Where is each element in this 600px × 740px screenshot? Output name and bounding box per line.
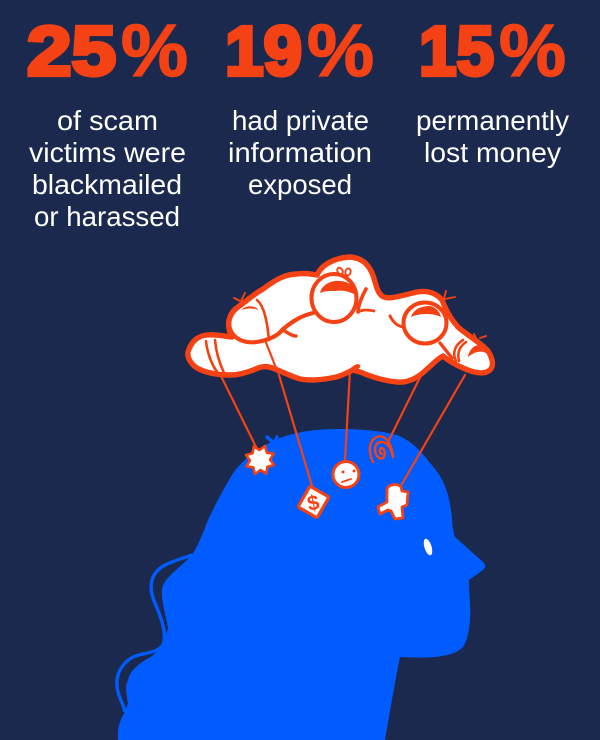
- number: 15%: 15: [419, 12, 494, 90]
- icon: puzzle piece: [378, 485, 408, 519]
- number: 15%: %: [499, 9, 566, 92]
- fingernails: [241, 281, 486, 357]
- label: 15 percent: lost money: [424, 137, 561, 168]
- label: 19 percent: information: [228, 137, 372, 168]
- icon: dollar tag: [298, 486, 329, 518]
- icon: smiling face: [333, 462, 359, 488]
- stat: 15 percent: [416, 9, 569, 168]
- label: 19 percent: [228, 105, 372, 200]
- number: 25%: 25: [27, 12, 116, 90]
- illustration: puppeteer hand: [188, 257, 492, 382]
- label: 25 percent: victims were: [29, 137, 186, 168]
- knots: [234, 267, 486, 338]
- number: 15%: [419, 9, 566, 92]
- hair strand outline: [117, 555, 192, 712]
- hand outline: [188, 257, 492, 382]
- stat: 25 percent: [27, 9, 188, 232]
- icon: spiral: [370, 436, 393, 462]
- illustration: head silhouette: [117, 429, 485, 740]
- number: 19%: [225, 9, 374, 92]
- label: 15 percent: [416, 105, 569, 168]
- number: 25%: %: [121, 9, 188, 92]
- left fingertip and wrist crease: [229, 306, 313, 342]
- head shape: [118, 429, 485, 740]
- label: 15 percent: permanently: [416, 105, 569, 136]
- label: 25 percent: of scam: [57, 105, 158, 136]
- finger creases: [206, 289, 466, 373]
- number: 19%: %: [307, 9, 374, 92]
- icon: star: [246, 446, 274, 474]
- stat: 19 percent: [225, 9, 374, 200]
- label: 19 percent: had private: [232, 105, 369, 136]
- icon: blue tuft: [267, 437, 277, 443]
- label: 25 percent: or harassed: [34, 201, 180, 232]
- label: 19 percent: exposed: [248, 169, 352, 200]
- string inside hand: [265, 340, 278, 373]
- centre fingertip: [312, 274, 356, 322]
- label: 25 percent: blackmailed: [32, 169, 182, 200]
- number: 25%: [27, 9, 188, 92]
- icon: dollar tag: $: [305, 491, 322, 516]
- illustration: puppet strings: [221, 316, 465, 486]
- right fingertip: [404, 302, 446, 344]
- number: 19%: 19: [225, 12, 302, 90]
- eye: [422, 538, 434, 556]
- label: 25 percent: [29, 105, 186, 232]
